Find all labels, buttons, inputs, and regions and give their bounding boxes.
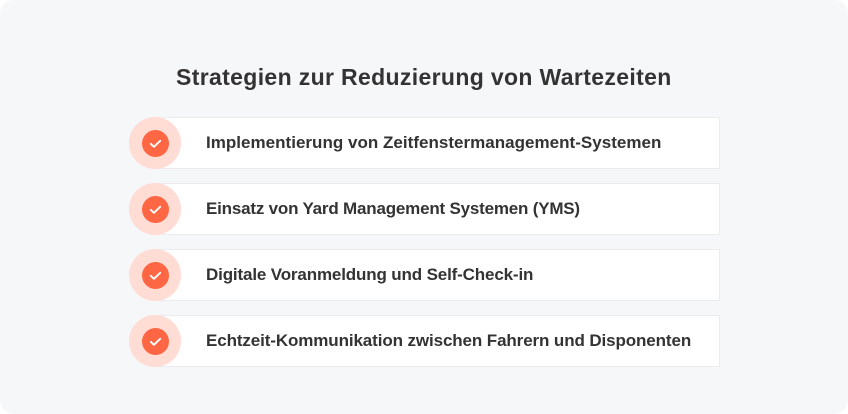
list item 2 bbox=[129, 183, 720, 235]
icon: check badge 3 bbox=[129, 249, 181, 301]
item 4 text: Echtzeit-Kommunikation zwischen Fahrern und Disponenten bbox=[206, 331, 691, 350]
icon: check badge 4 bbox=[129, 315, 181, 367]
item 1 text: Implementierung von Zeitfenstermanagement-Systemen bbox=[206, 133, 661, 152]
item 2 card bbox=[155, 183, 720, 235]
item 3 text: Digitale Voranmeldung und Self-Check-in bbox=[206, 265, 533, 284]
title: Strategien zur Reduzierung von Wartezeiten bbox=[176, 64, 672, 90]
item 2 text: Einsatz von Yard Management Systemen (YMS) bbox=[206, 199, 580, 218]
list item 1 bbox=[129, 117, 720, 169]
list item 3 bbox=[129, 249, 720, 301]
icon: check badge 2 bbox=[129, 183, 181, 235]
item 4 card bbox=[155, 315, 720, 367]
item 1 card bbox=[155, 117, 720, 169]
list item 4 bbox=[129, 315, 720, 367]
icon: check badge 1 bbox=[129, 117, 181, 169]
item 3 card bbox=[155, 249, 720, 301]
